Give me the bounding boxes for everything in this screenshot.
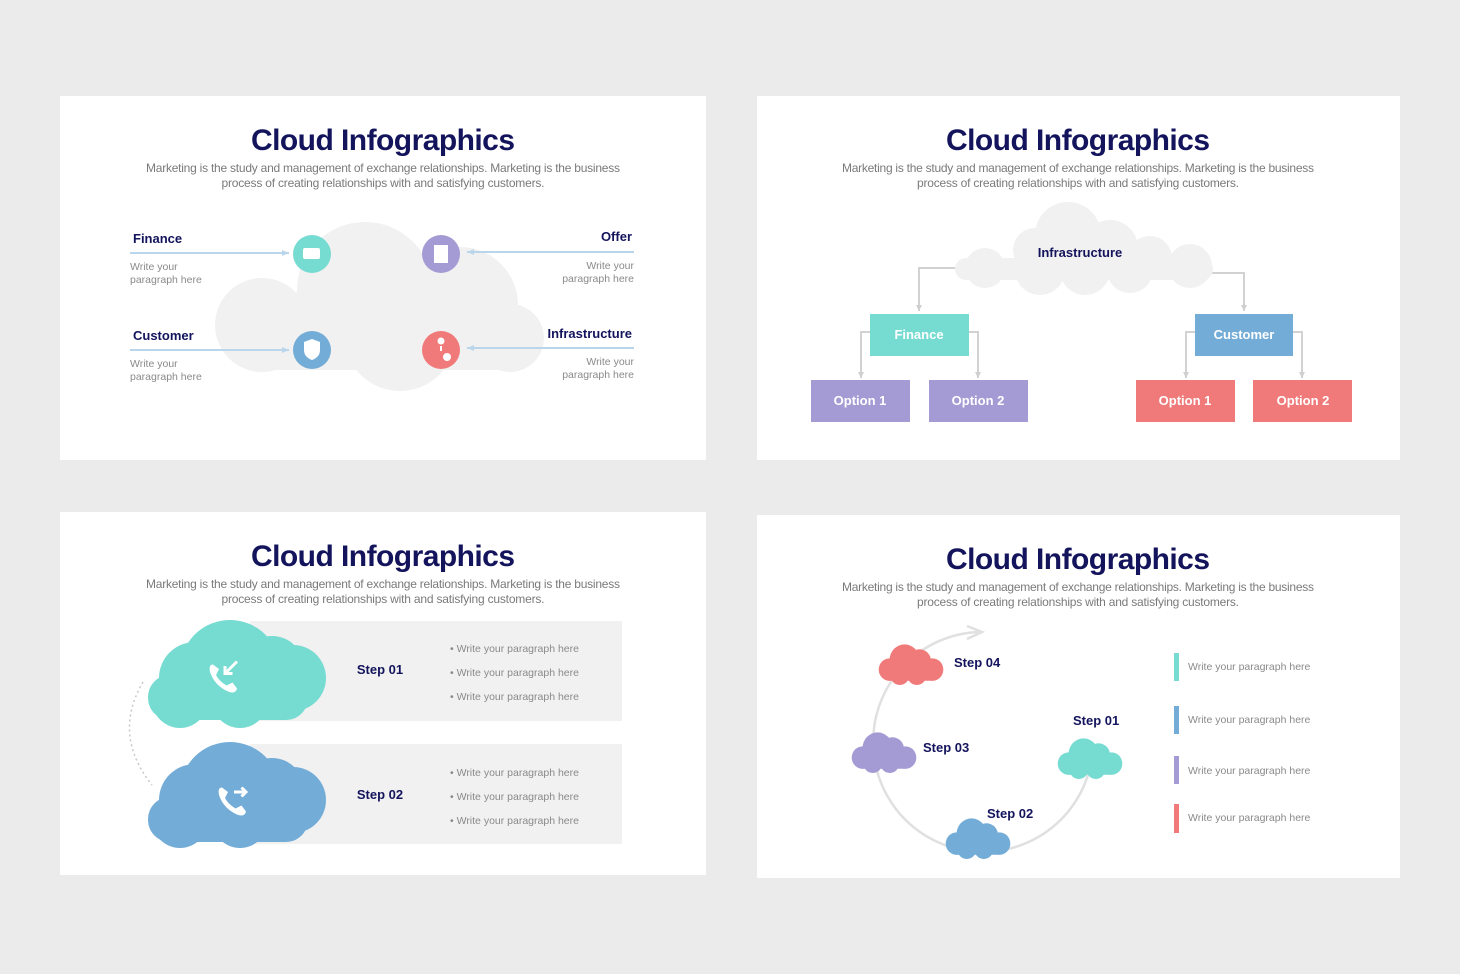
cloud: step 2 blue <box>148 742 326 848</box>
infrastructure cloud: Infrastructure <box>1038 245 1122 260</box>
cloud: step 02 <box>946 818 1010 859</box>
subtitle: Marketing is the study and management of exchange relationships. Marketing is the business <box>842 161 1314 175</box>
icon: customer shield <box>293 331 331 369</box>
title: Cloud Infographics <box>251 124 515 157</box>
step labels <box>357 662 403 802</box>
labels: Write your <box>586 260 634 272</box>
subtitle <box>146 161 620 190</box>
cloud: step 04 <box>879 644 943 685</box>
boxes: options: Option 2 <box>1277 393 1329 408</box>
bullet text: • Write your paragraph here <box>450 815 579 827</box>
subtitle: process of creating relationships with and satisfying customers. <box>222 592 544 606</box>
step labels: Step 02 <box>357 787 403 802</box>
labels: Write your <box>130 261 178 273</box>
title: Cloud Infographics <box>946 543 1210 576</box>
step labels: Step 01 <box>357 662 403 677</box>
labels: paragraph here <box>130 274 202 286</box>
step labels: Step 03 <box>923 740 969 755</box>
subtitle: process of creating relationships with and satisfying customers. <box>917 595 1239 609</box>
panel: cycle <box>757 515 1400 878</box>
subtitle: Marketing is the study and management of exchange relationships. Marketing is the business <box>842 580 1314 594</box>
subtitle: process of creating relationships with and satisfying customers. <box>222 176 544 190</box>
labels: paragraph here <box>562 369 634 381</box>
cloud: step 01 <box>1058 738 1122 779</box>
bullet text: • Write your paragraph here <box>450 691 579 703</box>
cloud: step 1 teal <box>148 620 326 728</box>
title: Cloud Infographics <box>251 540 515 573</box>
legend <box>1174 653 1311 833</box>
labels: paragraph here <box>130 371 202 383</box>
subtitle <box>146 577 620 606</box>
bullet text <box>450 643 579 827</box>
step labels: Step 04 <box>954 655 1001 670</box>
bullet text: • Write your paragraph here <box>450 667 579 679</box>
boxes: options: Option 1 <box>1159 393 1211 408</box>
legend: Write your paragraph here <box>1188 661 1311 673</box>
bullet text: • Write your paragraph here <box>450 791 579 803</box>
boxes: options <box>811 380 1352 422</box>
bullet text: • Write your paragraph here <box>450 643 579 655</box>
cycle arc with arrow <box>873 626 1088 852</box>
panel: cloud with icons <box>60 96 706 460</box>
labels: Infrastructure <box>547 326 632 341</box>
labels: Write your <box>586 356 634 368</box>
subtitle: process of creating relationships with and satisfying customers. <box>917 176 1239 190</box>
subtitle <box>842 161 1314 190</box>
subtitle: Marketing is the study and management of exchange relationships. Marketing is the business <box>146 161 620 175</box>
panel: hierarchy <box>757 96 1400 460</box>
box: customer: Customer <box>1214 327 1274 342</box>
big gray cloud <box>215 222 544 391</box>
icon: offer document <box>422 235 460 273</box>
bullet text: • Write your paragraph here <box>450 767 579 779</box>
dotted arc <box>129 682 152 785</box>
icon: infrastructure <box>422 331 460 369</box>
bars <box>250 621 622 721</box>
subtitle <box>842 580 1314 609</box>
legend: Write your paragraph here <box>1188 765 1311 777</box>
panel: steps with phones <box>60 512 706 875</box>
box: customer <box>1195 314 1293 356</box>
step labels <box>923 655 1119 821</box>
legend: Write your paragraph here <box>1188 812 1311 824</box>
labels: Offer <box>601 229 632 244</box>
labels: Customer <box>133 328 194 343</box>
boxes: options: Option 1 <box>834 393 886 408</box>
connectors <box>861 268 1302 378</box>
labels: paragraph here <box>562 273 634 285</box>
boxes: options: Option 2 <box>952 393 1004 408</box>
legend: Write your paragraph here <box>1188 714 1311 726</box>
arrows <box>130 252 634 350</box>
labels <box>130 229 634 383</box>
labels: Write your <box>130 358 178 370</box>
cloud: step 03 <box>852 732 916 773</box>
icon: finance card <box>293 235 331 273</box>
title: Cloud Infographics <box>946 124 1210 157</box>
step labels: Step 01 <box>1073 713 1119 728</box>
subtitle: Marketing is the study and management of exchange relationships. Marketing is the business <box>146 577 620 591</box>
box: finance: Finance <box>894 327 944 342</box>
box: finance <box>870 314 969 356</box>
infrastructure cloud <box>955 202 1213 295</box>
step labels: Step 02 <box>987 806 1033 821</box>
labels: Finance <box>133 231 182 246</box>
